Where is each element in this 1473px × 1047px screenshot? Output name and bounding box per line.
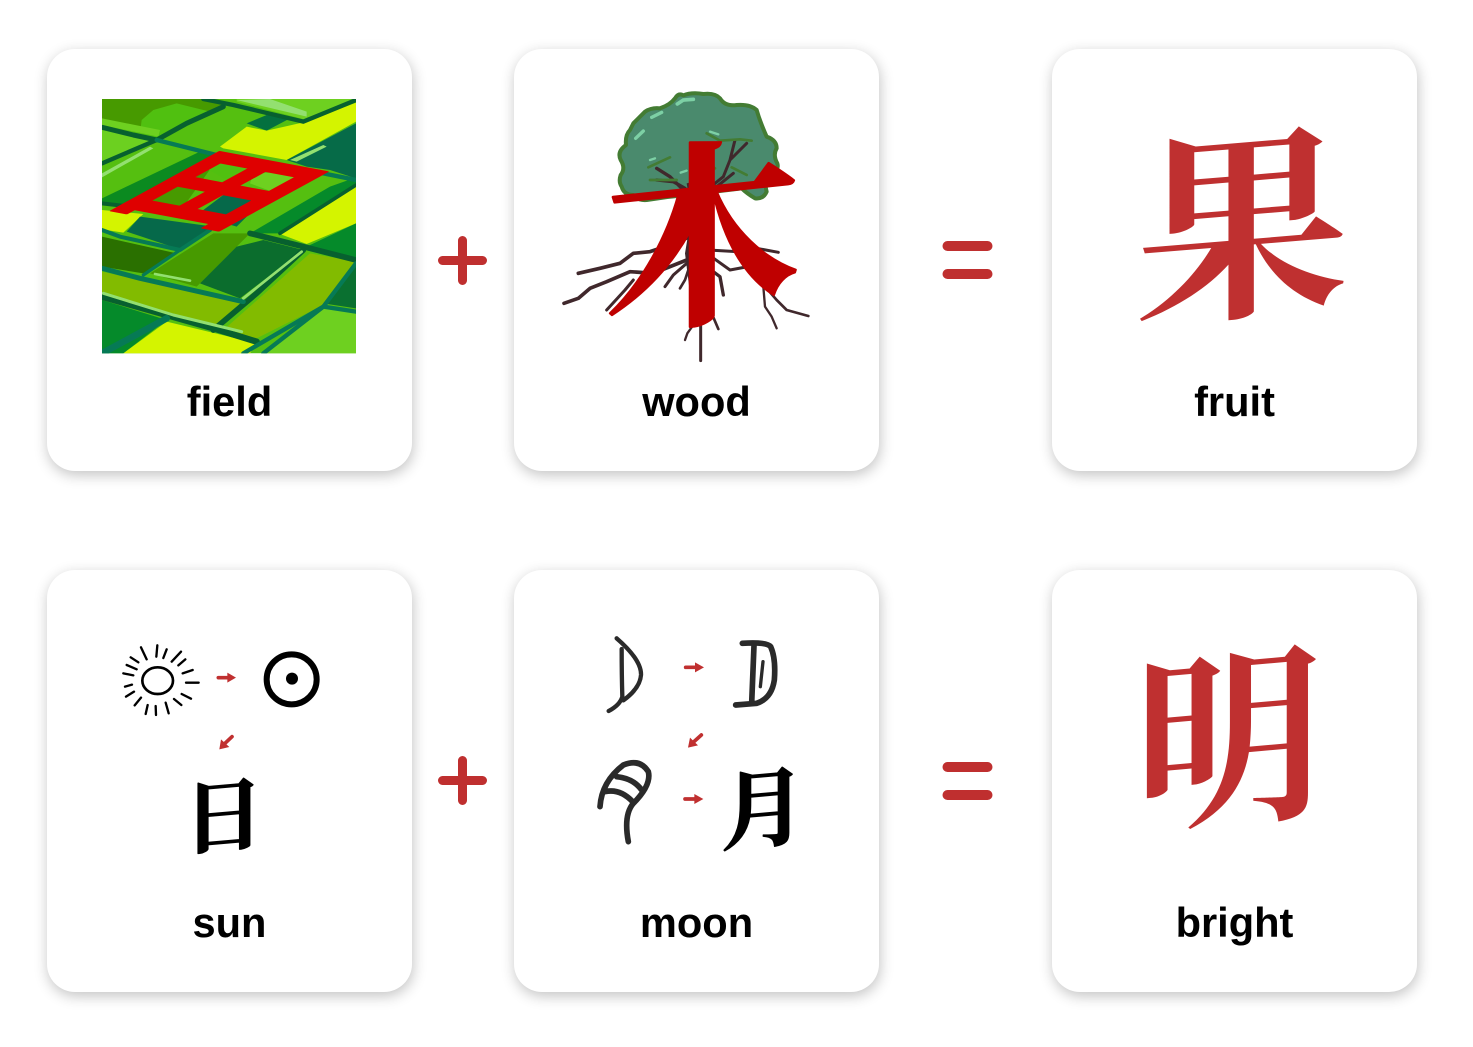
panel: field card <box>47 49 412 471</box>
icon: circle with dot pictograph <box>267 654 317 704</box>
icon: sun pictograph <box>123 645 199 715</box>
panel: moon card <box>514 570 879 992</box>
icon: seal-style moon pictograph <box>736 643 775 705</box>
character: field, red: 田 <box>84 141 353 242</box>
illustration: evolution of the moon character <box>597 636 806 862</box>
label: bright: bright <box>1176 899 1293 946</box>
illustration: evolution of the sun character <box>122 644 320 866</box>
operator: plus, bottom row <box>438 756 487 805</box>
panel: fruit card <box>1052 49 1417 471</box>
leaves highlights <box>636 99 765 185</box>
arrow: right <box>218 673 236 683</box>
character: fruit: 果 <box>1134 112 1350 354</box>
label: sun: sun <box>193 899 266 946</box>
label: field: field <box>187 378 272 425</box>
tree crown <box>619 93 778 200</box>
label: wood: wood <box>642 378 751 425</box>
character: moon: 月 <box>720 759 806 862</box>
illustration: tree with red character <box>562 91 810 362</box>
character: sun: 日 <box>183 771 263 866</box>
icon: oracle-style moon pictograph <box>600 763 649 842</box>
panel: bright card <box>1052 570 1417 992</box>
icon: crescent pictograph <box>609 638 641 711</box>
operator: equals, top row <box>942 241 992 279</box>
panel: sun card <box>47 570 412 992</box>
operator: equals, bottom row <box>942 762 992 800</box>
label: moon: moon <box>640 899 753 946</box>
character: wood, red: 木 <box>604 122 801 361</box>
arrow: right <box>685 794 703 804</box>
operator: plus, top row <box>438 236 487 285</box>
label: fruit: fruit <box>1194 378 1275 425</box>
tree trunk and roots <box>564 140 808 361</box>
arrow: down-left <box>219 737 232 749</box>
panel: wood card <box>514 49 879 471</box>
character: bright: 明 <box>1133 632 1323 859</box>
arrow: down-left <box>688 735 701 748</box>
arrow: right <box>686 662 704 672</box>
illustration: field with red character <box>102 99 356 354</box>
